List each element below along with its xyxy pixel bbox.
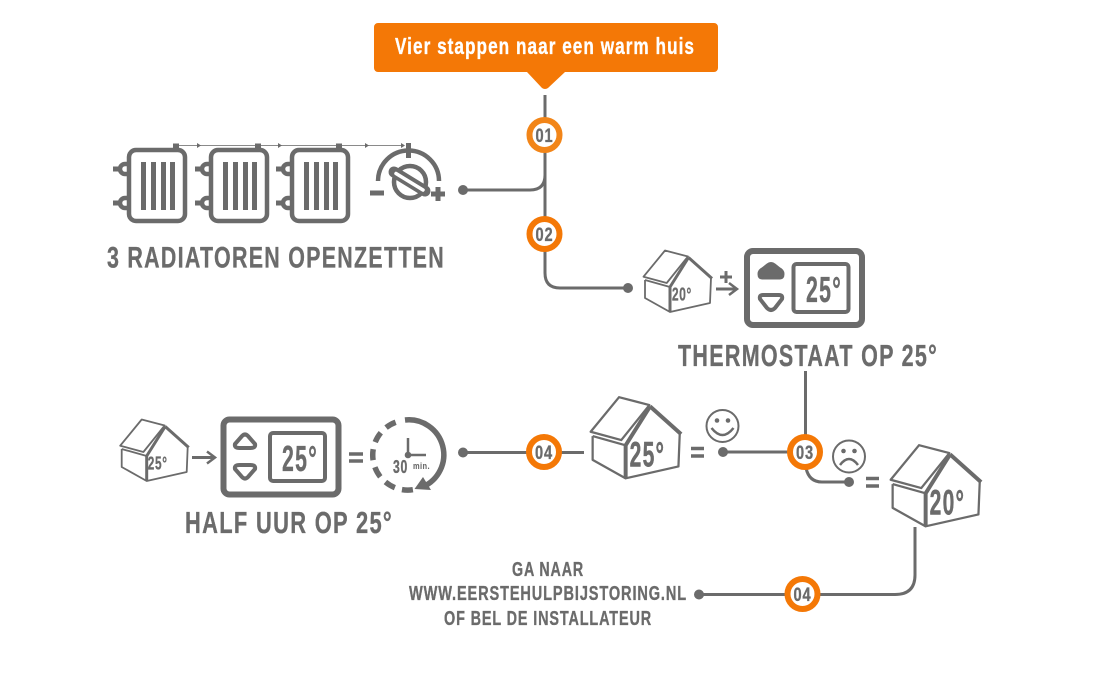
text block: call to action: OF BEL DE INSTALLATEUR — [444, 608, 652, 630]
equals: house 25 — [691, 448, 704, 456]
radiators with arrow sequence — [113, 143, 405, 221]
radiator 2 — [195, 150, 267, 221]
connector: house 25 to half hour clock — [458, 448, 584, 458]
heading: thermostaat op 25: THERMOSTAAT OP 25° — [678, 338, 938, 373]
badge: step 03: 03 — [796, 443, 814, 464]
icon: radiator dial with minus and plus — [370, 143, 445, 201]
icon: plus and arrow — [716, 271, 737, 295]
badge: step 02 — [530, 219, 560, 249]
icon: house 20 degrees small — [644, 250, 712, 312]
icon: house 25 degrees large — [591, 397, 681, 478]
badge: step 04 middle: 04 — [535, 443, 553, 464]
icon: 30 minute clock: 30 — [393, 457, 408, 477]
icon: house 20 degrees large — [891, 445, 981, 526]
badge: step 01 — [530, 120, 560, 150]
radiator 1 — [113, 150, 185, 221]
icon: house 25 degrees small: 25° — [148, 454, 168, 474]
icon: sad face — [833, 440, 865, 472]
badge: step 04 middle — [529, 437, 559, 467]
connector: step 2 to house — [545, 248, 633, 293]
equals: house 20 — [866, 478, 879, 486]
icon: thermostat set to 25 — [747, 251, 862, 325]
icon: thermostat at 25 — [224, 420, 338, 494]
icon: 30 minute clock: min. — [413, 461, 430, 471]
badge: step 03 — [790, 437, 820, 467]
heading: 3 radiatoren openzetten: 3 RADIATOREN OPENZETTEN — [107, 242, 445, 274]
connector: step 3 to smiley and sad face — [718, 447, 854, 487]
icon: house 20 degrees small: 20° — [672, 284, 692, 304]
icon: house 20 degrees large: 20° — [930, 482, 965, 522]
equals: half hour — [349, 454, 363, 461]
radiator 3 — [276, 150, 348, 221]
heading: half uur op 25: HALF UUR OP 25° — [185, 505, 393, 540]
icon: house 25 degrees large: 25° — [630, 434, 665, 474]
connector: house 20 to call to action — [694, 527, 915, 600]
text block: call to action: WWW.EERSTEHULPBIJSTORING.NL — [409, 583, 687, 605]
icon: house 25 degrees small — [120, 420, 189, 481]
banner: title callout — [374, 23, 718, 89]
title text: Vier stappen naar een warm huis — [395, 33, 695, 59]
badge: step 04 bottom — [788, 579, 818, 609]
badge: step 01: 01 — [536, 126, 554, 147]
badge: step 02: 02 — [536, 225, 554, 246]
connector: step 1 to radiators and step 2 — [458, 95, 545, 220]
badge: step 04 bottom: 04 — [794, 585, 812, 606]
arrow line across radiators — [173, 143, 405, 148]
text block: call to action — [409, 559, 687, 630]
text block: call to action: GA NAAR — [512, 559, 584, 581]
icon: thermostat set to 25: 25° — [806, 269, 842, 310]
icon: thermostat at 25: 25° — [282, 438, 318, 479]
connector: thermostat to step 3 — [804, 371, 807, 437]
icon: arrow to thermostat — [192, 452, 215, 464]
icon: 30 minute clock — [373, 420, 444, 490]
icon: smiley — [706, 410, 738, 442]
